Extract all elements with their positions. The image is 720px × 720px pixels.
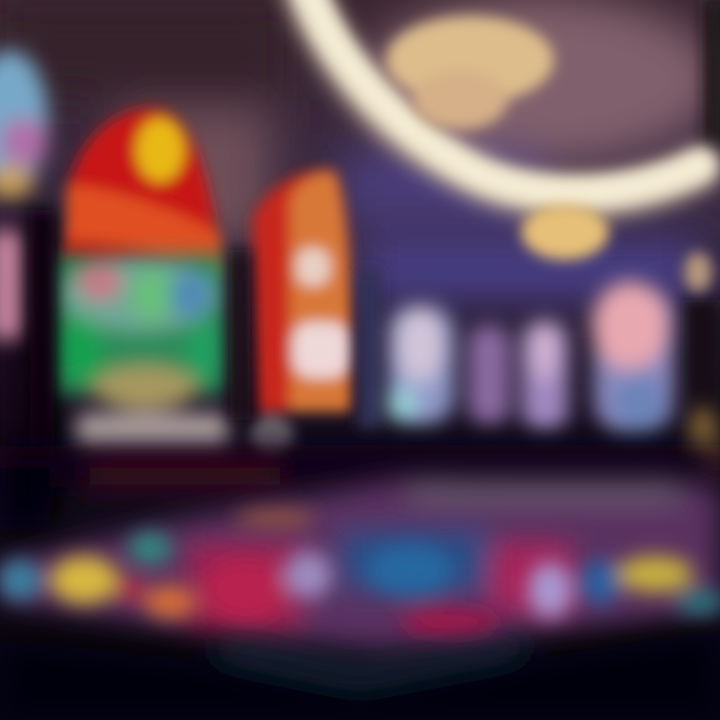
ceiling ring light [308,0,700,193]
dark machine gaps [30,210,380,510]
machine 2 [250,169,353,456]
floor reflection [0,478,720,650]
floor coloured tiles [0,510,720,636]
floor foreground shadow [0,630,720,720]
machine 1 body [56,255,228,452]
dark band below machines [0,445,720,530]
dark strip at right edge [682,0,720,470]
machine 1 red top [62,108,222,278]
distant machines [386,281,717,474]
ceiling [0,0,720,520]
ceiling ring light glow [305,0,700,198]
chandelier [386,16,712,292]
left edge machine [0,50,48,340]
